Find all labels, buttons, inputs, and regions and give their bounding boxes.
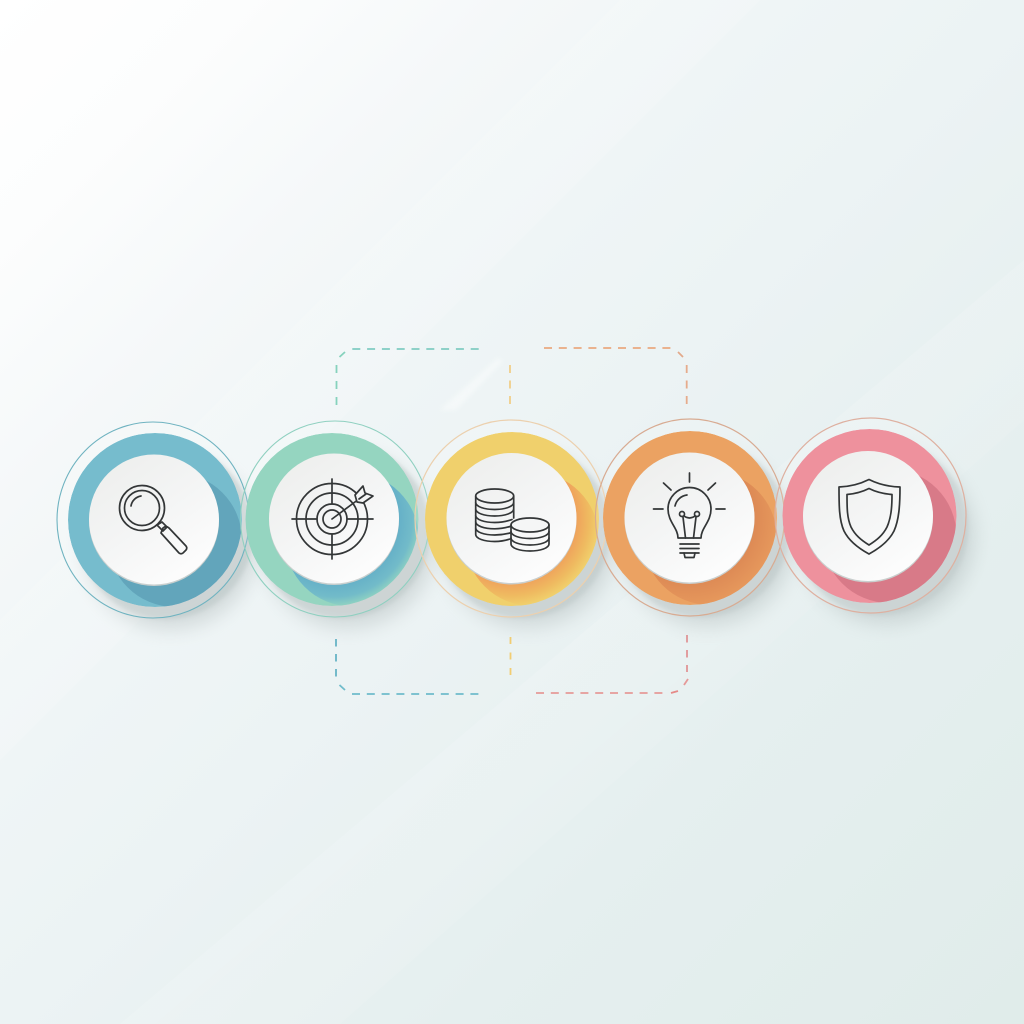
- step 5 white plate: [803, 451, 933, 581]
- step 2 colour disc: [246, 433, 419, 606]
- icon: magnifying glass: [120, 486, 187, 554]
- connector: bottom right dashed bracket: [536, 635, 688, 693]
- connector: bottom left dashed bracket: [336, 639, 479, 694]
- step 1 colour disc: [68, 433, 242, 607]
- connector: top right dashed bracket: [544, 348, 687, 404]
- step 5 outer ring: [775, 418, 966, 613]
- step 3 colour disc: [425, 432, 599, 606]
- step 1 outer ring: [57, 422, 249, 618]
- step 5: security: [775, 418, 975, 625]
- connector: top centre dashed line: [509, 365, 511, 404]
- step 2 outer ring: [240, 421, 430, 617]
- icon: shield: [839, 480, 900, 554]
- step 2 white plate: [269, 454, 399, 584]
- step 1 white plate: [89, 454, 219, 584]
- step 1: search: [57, 422, 258, 630]
- step 4 outer ring: [596, 419, 784, 616]
- step 3 white plate: [446, 453, 576, 583]
- step 2: target: [240, 421, 436, 629]
- step 3: coins: [415, 420, 616, 628]
- step 5 colour disc: [782, 429, 956, 603]
- icon: coin stacks: [476, 489, 549, 551]
- connector: top left dashed bracket: [336, 349, 480, 405]
- step 4: idea: [596, 419, 795, 627]
- step 4 white plate: [624, 452, 754, 582]
- connector: bottom centre dashed line: [510, 637, 512, 675]
- step 3 outer ring: [415, 420, 607, 617]
- step 4 colour disc: [603, 431, 777, 605]
- icon: light bulb: [654, 473, 725, 558]
- icon: target with arrow: [292, 479, 373, 559]
